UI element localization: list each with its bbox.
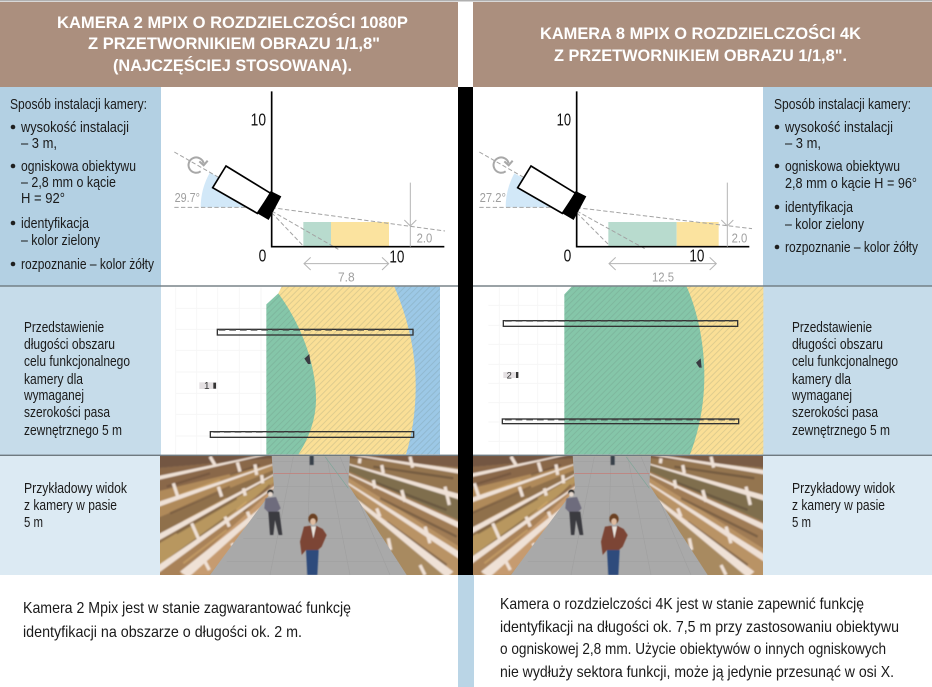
text block: right plan description: szerokości pasa: [792, 405, 879, 421]
chart: right side-view camera diagram: [479, 91, 752, 285]
chart: right side-view camera diagram: 10: [557, 110, 571, 130]
text block: left plan description: wymaganej: [23, 388, 84, 404]
text block: left example view caption: 5 m: [24, 515, 43, 531]
chart: right plan view of coverage zones: 2: [507, 370, 512, 380]
text block: left plan description: kamery dla: [24, 372, 84, 388]
text block: right plan description: wymaganej: [791, 388, 852, 404]
text block: right plan description: kamery dla: [792, 372, 852, 388]
text block: right example view caption: z kamery w pasie: [792, 498, 885, 514]
heading: left camera: KAMERA 2 MPIX O ROZDZIELCZOŚCI 1080P: [57, 13, 408, 32]
chart: left side-view camera diagram: 0: [259, 245, 266, 265]
text block: left conclusion: Kamera 2 Mpix jest w stanie zagwarantować funkcję: [23, 600, 351, 617]
text block: right conclusion: Kamera o rozdzielczości 4K jest w stanie zapewnić funkcję: [500, 596, 864, 613]
text block: right plan description: zewnętrznego 5 m: [792, 423, 890, 439]
text block: right plan description: długości obszaru: [792, 337, 883, 353]
text block: left installation parameters: – 2,8 mm o kącie: [21, 175, 116, 191]
chart: right side-view camera diagram: 2.0: [732, 231, 747, 246]
text block: right installation parameters: – 3 m,: [785, 136, 821, 152]
text block: left installation parameters: – 3 m,: [21, 136, 57, 152]
heading: right camera: KAMERA 8 MPIX O ROZDZIELCZOŚCI 4K: [540, 24, 861, 43]
text block: right installation parameters: 2,8 mm o kącie H = 96°: [785, 176, 917, 192]
chart: left side-view camera diagram: [174, 91, 445, 285]
text block: left installation parameters: Sposób instalacji kamery:: [10, 97, 147, 113]
chart: right side-view camera diagram: 27.2°: [480, 190, 506, 205]
text block: right installation parameters: – kolor zielony: [785, 217, 865, 233]
chart: left side-view camera diagram: 7.8: [338, 270, 355, 285]
text block: left example view caption: z kamery w pasie: [24, 498, 117, 514]
text block: left conclusion: [23, 600, 351, 641]
text block: right installation parameters: [774, 97, 919, 256]
heading: right camera: Z PRZETWORNIKIEM OBRAZU 1/1,8".: [554, 47, 847, 65]
text block: left plan description: [23, 320, 130, 439]
divider lines: [0, 285, 932, 287]
text block: left plan description: długości obszaru: [24, 337, 115, 353]
text block: left plan description: szerokości pasa: [24, 405, 111, 421]
text block: right example view caption: Przykładowy widok: [792, 481, 896, 497]
chart: right side-view camera diagram: 0: [564, 245, 571, 265]
text block: left plan description: celu funkcjonalnego: [24, 354, 130, 370]
text block: left plan description: Przedstawienie: [24, 320, 104, 336]
central blue strip: [458, 575, 474, 687]
heading: right camera: [473, 2, 932, 87]
text block: left example view caption: Przykładowy widok: [24, 481, 128, 497]
heading: left camera: [0, 2, 458, 87]
chart: left side-view camera diagram: 10: [251, 110, 266, 130]
chart: left side-view camera diagram: 2.0: [417, 231, 432, 246]
white gap between headings: [458, 2, 473, 87]
text block: left installation parameters: rozpoznanie – kolor żółty: [21, 257, 155, 273]
chart: right side-view camera diagram: 10: [689, 245, 704, 265]
illustration: left camera example view: [160, 456, 458, 575]
text block: left installation parameters: wysokość instalacji: [20, 120, 129, 136]
text block: left installation parameters: [10, 97, 155, 273]
chart: left plan view of coverage zones: [176, 287, 440, 454]
text block: left example view caption: [24, 481, 128, 531]
text block: right installation parameters: wysokość instalacji: [784, 120, 893, 136]
text block: right example view caption: 5 m: [792, 515, 811, 531]
text block: left plan description: zewnętrznego 5 m: [24, 423, 122, 439]
panel: left column info backgrounds: [0, 87, 161, 575]
text block: left conclusion: identyfikacji na obszarze o długości ok. 2 m.: [23, 624, 302, 641]
chart: right side-view camera diagram: 12.5: [652, 270, 674, 285]
text block: left installation parameters: – kolor zielony: [21, 233, 101, 249]
text block: right plan description: celu funkcjonalnego: [792, 354, 898, 370]
text block: right conclusion: [500, 596, 899, 681]
text block: left installation parameters: H = 92°: [21, 191, 65, 207]
illustration: right camera example view: [473, 456, 763, 575]
text block: right installation parameters: ogniskowa obiektywu: [785, 159, 900, 175]
chart: left side-view camera diagram: 29.7°: [175, 190, 200, 205]
text block: right plan description: [791, 320, 898, 439]
text block: right plan description: Przedstawienie: [792, 320, 872, 336]
chart: left side-view camera diagram: 10: [389, 246, 404, 266]
chart: right plan view of coverage zones: [488, 287, 763, 454]
heading: left camera: (NAJCZĘŚCIEJ STOSOWANA).: [113, 56, 352, 75]
text block: left installation parameters: ogniskowa obiektywu: [21, 159, 136, 175]
chart: left plan view of coverage zones: 1: [204, 381, 210, 392]
text block: left installation parameters: identyfikacja: [21, 216, 90, 232]
heading: left camera: Z PRZETWORNIKIEM OBRAZU 1/1,8": [88, 35, 380, 53]
text block: right installation parameters: identyfikacja: [785, 200, 854, 216]
text block: right example view caption: [792, 481, 896, 531]
panel: right column info backgrounds: [763, 87, 932, 575]
central black column: [458, 87, 473, 575]
